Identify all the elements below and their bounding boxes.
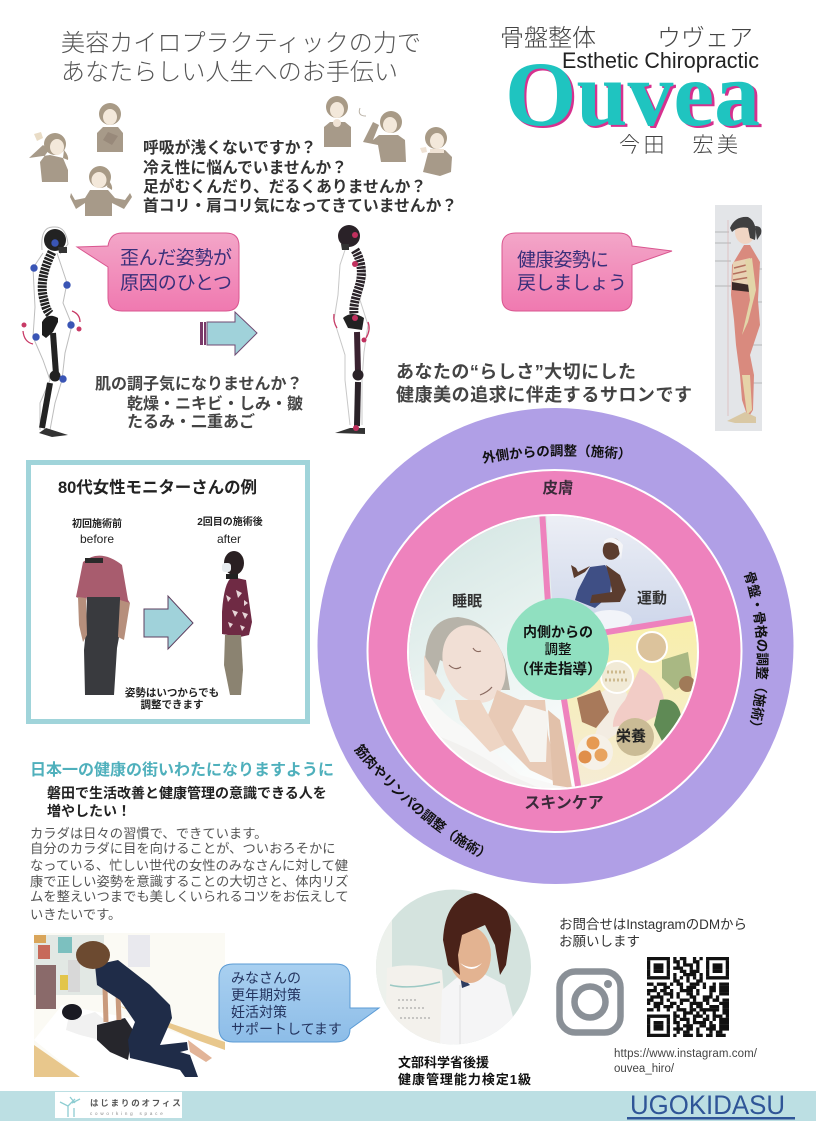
text: contact prompt: お願いします <box>559 934 640 949</box>
logo: Hajimari no Office <box>55 1092 183 1118</box>
logo: Ouvea Esthetic Chiropractic: Esthetic Chiropractic <box>562 48 759 73</box>
text: Instagram URL <box>614 1048 758 1075</box>
callout: support message: 妊活対策 <box>231 1004 287 1020</box>
icon: Instagram <box>560 972 620 1032</box>
center: inner adjustment: 調整 <box>544 642 572 657</box>
caption: posture adjustable: 調整できます <box>140 698 204 711</box>
labels: outer ring: 骨盤・骨格の調整（施術） <box>744 572 769 726</box>
labels: segments: 栄養 <box>616 727 646 745</box>
text: Instagram URL: ouvea_hiro/ <box>614 1063 675 1075</box>
labels: segments: 運動 <box>637 590 667 607</box>
subheading: goal <box>47 785 327 819</box>
logo: Ouvea Esthetic Chiropractic: 今田 宏美 <box>619 134 738 157</box>
skeleton: bad posture <box>22 227 82 437</box>
checklist text: 冷え性に悩んでいませんか？ <box>143 158 347 177</box>
photo: nutrition <box>567 621 697 786</box>
text block: body copy: いきたいです。 <box>30 907 121 922</box>
footer band <box>0 1091 816 1121</box>
logo: Ouvea Esthetic Chiropractic: Ouvea <box>505 43 760 145</box>
label: before <box>72 517 122 546</box>
arrow: before to after <box>144 596 193 649</box>
text: skin concerns: 肌の調子気になりませんか？ <box>95 374 303 393</box>
text block: body copy: 自分のカラダに目を向けることが、ついおろそかに <box>30 841 336 856</box>
callout: return to healthy posture <box>502 233 672 311</box>
center: inner adjustment <box>507 598 609 700</box>
text: contact prompt: お問合せはInstagramのDMから <box>559 917 747 932</box>
text: certification: 文部科学省後援 <box>398 1055 489 1070</box>
caption: posture adjustable <box>125 686 219 711</box>
text: skin concerns: 乾燥・ニキビ・しみ・皺 <box>127 394 303 413</box>
caption: posture adjustable: 姿勢はいつからでも <box>125 686 219 699</box>
icon: women with symptoms <box>29 96 452 216</box>
panel: monitor before and after <box>28 462 308 722</box>
photo: profile portrait <box>376 889 531 1045</box>
logo: Ouvea Esthetic Chiropractic: ウヴェア <box>657 25 753 52</box>
callout: support message: サポートしてます <box>231 1021 342 1037</box>
icon: woman C <box>70 166 132 216</box>
label: after: after <box>217 532 241 546</box>
checklist text <box>143 138 457 215</box>
labels: segments: 皮膚 <box>542 479 574 497</box>
checklist text: 足がむくんだり、だるくありませんか？ <box>143 177 426 196</box>
checklist text: 首コリ・肩コリ気になってきていませんか？ <box>143 196 457 215</box>
labels: outer ring: 筋肉やリンパの調整（施術） <box>354 744 484 857</box>
photo: before <box>76 556 130 695</box>
icon: woman D <box>324 96 351 147</box>
QR code <box>647 959 729 1035</box>
text block: body copy: なっている、忙しい世代の女性のみなさんに対して健 <box>30 858 348 873</box>
photo: sleep <box>409 516 697 788</box>
callout: support message: 更年期対策 <box>231 987 301 1003</box>
text: Instagram URL: https://www.instagram.com/ <box>614 1048 758 1060</box>
logo: Hajimari no Office: はじまりのオフィス <box>90 1098 183 1108</box>
labels: outer ring <box>354 444 769 857</box>
label: after <box>197 515 263 546</box>
callout: support message: みなさんの <box>231 970 301 986</box>
center: inner adjustment: （伴走指導） <box>514 660 602 678</box>
label: before: 初回施術前 <box>72 517 122 530</box>
labels: segments: 睡眠 <box>452 593 482 610</box>
text: contact prompt <box>559 917 747 949</box>
label: after: 2回目の施術後 <box>197 515 263 528</box>
text: salon statement: 健康美の追求に伴走するサロンです <box>396 384 692 405</box>
label: before: before <box>80 532 114 546</box>
text: salon statement: あなたの“らしさ”大切にした <box>396 362 636 382</box>
figure: anatomy <box>715 205 762 431</box>
callout: return to healthy posture: 健康姿勢に <box>517 249 609 271</box>
checklist text: 呼吸が浅くないですか？ <box>143 138 316 157</box>
callout: distorted posture <box>77 233 239 311</box>
text: skin concerns: たるみ・二重あご <box>127 412 255 431</box>
logo: UGOKIDASU: UGOKIDASU <box>630 1090 785 1120</box>
text: certification <box>398 1055 531 1087</box>
photo: exercise <box>546 516 692 626</box>
heading: monitor example: 80代女性モニターさんの例 <box>58 478 257 497</box>
logo: Hajimari no Office: coworking space <box>90 1111 166 1116</box>
icon: woman A <box>29 132 68 182</box>
callout: distorted posture: 原因のひとつ <box>120 273 232 294</box>
text block: body copy <box>30 826 349 922</box>
text: certification: 健康管理能力検定1級 <box>398 1072 531 1087</box>
title: 美容カイロプラクティックの力で <box>61 30 421 57</box>
heading: Iwata wish: 日本一の健康の街いわたになりますように <box>30 760 334 779</box>
ring: pink adjustment <box>368 470 742 832</box>
dividers <box>542 510 700 792</box>
labels: outer ring: 外側からの調整（施術） <box>482 444 622 464</box>
ring: outer adjustment <box>318 408 794 884</box>
text block: body copy: ムを整えいつまでも美しくいられるコツをお伝えして <box>30 889 349 904</box>
arrow: posture improvement <box>200 312 257 355</box>
photo: after <box>222 551 252 695</box>
subheading: goal: 増やしたい！ <box>47 803 131 819</box>
diagram: concentric wellness circle <box>318 408 794 884</box>
text: salon statement <box>396 362 692 405</box>
labels: segments <box>452 479 667 812</box>
callout: return to healthy posture: 戻しましょう <box>517 273 627 294</box>
subheading: goal: 磐田で生活改善と健康管理の意識できる人を <box>47 785 327 801</box>
text: skin concerns <box>95 374 303 431</box>
logo: Ouvea Esthetic Chiropractic: Ouvea <box>507 45 763 147</box>
icon: woman B <box>97 103 123 152</box>
skeleton: correct posture <box>334 225 369 434</box>
labels: segments: スキンケア <box>524 794 604 812</box>
title <box>61 30 421 86</box>
center: inner adjustment: 内側からの <box>523 624 593 640</box>
logo: Ouvea Esthetic Chiropractic: 骨盤整体 <box>500 25 596 52</box>
text block: body copy: カラダは日々の習慣で、できています。 <box>30 826 267 841</box>
photo: chiropractic treatment <box>34 933 225 1077</box>
text block: body copy: 康で正しい姿勢を意識することの大切さと、体内リズ <box>30 874 348 889</box>
callout: support message <box>219 964 379 1042</box>
callout: distorted posture: 歪んだ姿勢が <box>120 247 232 269</box>
title: あなたらしい人生へのお手伝い <box>61 59 398 86</box>
icon: woman F <box>420 127 452 176</box>
icon: woman E <box>359 108 406 162</box>
